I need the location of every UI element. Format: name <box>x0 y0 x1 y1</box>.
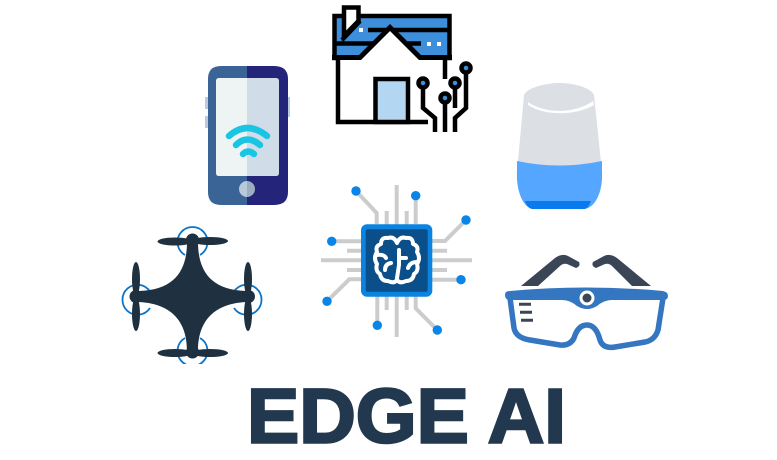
icon: AI chip with brain <box>321 185 472 337</box>
icon: smart glasses <box>505 255 668 347</box>
title: EDGE AI <box>247 374 566 460</box>
icon: smart speaker <box>517 83 602 209</box>
icon: drone <box>122 227 262 372</box>
icon: smart home <box>332 8 470 132</box>
icon: smartphone with wifi <box>205 66 290 205</box>
